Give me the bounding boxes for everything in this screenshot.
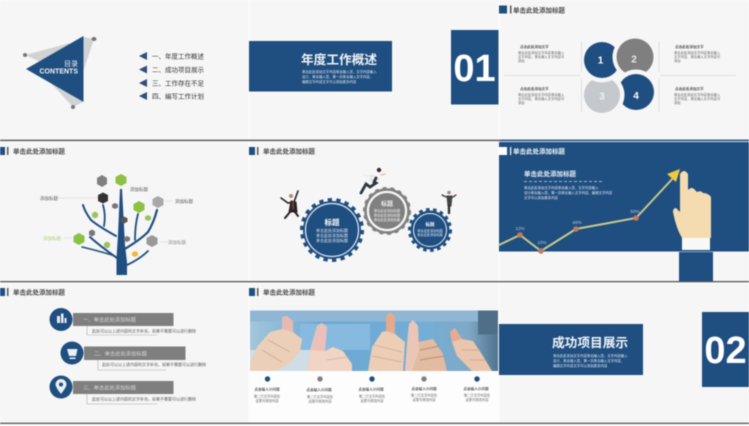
band description: 编辑文字内容文字可以添加更多内容 bbox=[302, 79, 357, 84]
title band bbox=[249, 41, 392, 92]
small gear bbox=[410, 210, 450, 250]
sub heading: 单击此处添加标题 bbox=[524, 169, 576, 178]
big gear: 单击此处添加标题 bbox=[316, 232, 348, 238]
dashed rule bbox=[524, 180, 602, 182]
slide: contents bbox=[0, 0, 248, 141]
header title: 单击此处添加标题 bbox=[263, 146, 316, 156]
circle 2 bbox=[616, 38, 654, 76]
item 1: 此处可以以上述内容的文字补充，如果不需要可以进行删除 bbox=[92, 328, 196, 334]
number 01: 01 bbox=[453, 48, 496, 90]
middle gear: 单击此处添加标题 bbox=[374, 208, 401, 213]
person middle bbox=[361, 168, 385, 193]
item 2: 此处可以以上述内容的文字补充，如果不需要可以进行删除 bbox=[102, 361, 206, 367]
contents list bbox=[139, 52, 204, 100]
text block top right: 添加 bbox=[674, 58, 681, 63]
middle gear: 单击此处添加标题 bbox=[374, 217, 401, 222]
big gear bbox=[302, 200, 362, 260]
text block bottom left: 点击此处添加文字 bbox=[520, 86, 549, 91]
header title: 单击此处添加标题 bbox=[513, 6, 566, 14]
header title: 单击此处添加标题 bbox=[13, 288, 66, 296]
text block bottom right: 文字内容，单击输入文字内容可 bbox=[674, 96, 721, 101]
number box bbox=[451, 30, 498, 104]
small gear: 标题 bbox=[426, 221, 435, 228]
band description bbox=[553, 353, 628, 368]
column texts: 第二行文字内容在 bbox=[307, 394, 334, 399]
photo bbox=[250, 310, 498, 371]
tree labels: 添加标题 bbox=[168, 239, 186, 246]
header title: 单击此处添加标题 bbox=[13, 146, 66, 156]
data labels: 12% bbox=[515, 226, 525, 231]
tree labels: 添加标题 bbox=[175, 198, 193, 205]
circle 1: 1 bbox=[598, 56, 604, 66]
sleeve bbox=[679, 252, 713, 281]
slide: line chart with hand bbox=[499, 142, 749, 281]
blue triangle bbox=[26, 36, 84, 102]
band description: 单击此处添加文字内容单击输入您，文字内容输入 bbox=[553, 353, 628, 358]
circle 2: 2 bbox=[631, 54, 637, 66]
item 1: 一、单击此处添加标题 bbox=[83, 316, 137, 324]
hand 2 bbox=[307, 323, 352, 371]
slide: gears bbox=[249, 142, 498, 281]
contents title bbox=[40, 60, 78, 76]
text block top right bbox=[674, 44, 721, 63]
row separators bbox=[0, 140, 749, 424]
header marker bbox=[499, 6, 512, 14]
data labels: 10% bbox=[537, 240, 547, 245]
hexagon nodes bbox=[74, 174, 164, 257]
small gear: 单击此处添加标题 bbox=[417, 232, 444, 237]
contents list: 一、年度工作概述 bbox=[152, 52, 204, 60]
text block top right: 点击此处添加文字 bbox=[675, 44, 704, 49]
number box bbox=[702, 312, 749, 387]
header marker bbox=[0, 147, 8, 155]
band title: 成功项目展示 bbox=[552, 335, 628, 350]
circle 4 bbox=[618, 74, 654, 110]
slide: tree bbox=[0, 142, 248, 281]
contents list: 四、编写工作计划 bbox=[152, 92, 204, 100]
number 02: 02 bbox=[704, 330, 747, 372]
lower white panel bbox=[250, 371, 498, 423]
band description: 设计，单击输入您，第一页单击输入文字内容， bbox=[553, 358, 624, 363]
middle gear: 标题 bbox=[381, 200, 393, 208]
big gear: 单击此处添加标题 bbox=[316, 227, 348, 233]
text block bottom left: 添加 bbox=[518, 100, 525, 105]
person right bbox=[442, 191, 456, 213]
shirt cuff bbox=[682, 238, 710, 250]
slide: thumbs up photo bbox=[249, 284, 498, 423]
column texts bbox=[254, 386, 491, 404]
header title: 单击此处添加标题 bbox=[263, 288, 316, 296]
header marker bbox=[249, 147, 258, 155]
text block top right: 文字内容，单击输入文字内容可 bbox=[674, 54, 721, 59]
contents list: 三、工作存在不足 bbox=[152, 78, 204, 88]
item 1 bbox=[50, 308, 196, 335]
person left bbox=[281, 191, 298, 218]
leader lines bbox=[58, 198, 172, 242]
column texts: 这里可修改内容 bbox=[465, 397, 489, 402]
tree labels: 添加标题 bbox=[130, 186, 148, 193]
item 3: 三、单击此处添加标题 bbox=[83, 384, 137, 392]
tree labels bbox=[40, 186, 193, 246]
column texts: 点击输入小问题 bbox=[411, 386, 437, 391]
column texts: 点击输入小问题 bbox=[358, 386, 384, 392]
column texts: 点击输入小问题 bbox=[306, 387, 332, 392]
text block bottom right bbox=[674, 86, 721, 105]
text block bottom right: 单击此处添加文字内容单击输入 bbox=[674, 92, 721, 97]
decorative gray triangles bbox=[25, 37, 94, 107]
text block bottom left: 单击此处添加文字内容单击输入 bbox=[518, 92, 565, 97]
hand 3 bbox=[368, 312, 405, 371]
middle gear: 单击此处添加标题 bbox=[374, 212, 401, 218]
circle 4: 4 bbox=[633, 91, 639, 102]
data points bbox=[517, 215, 639, 254]
hand 1 bbox=[250, 316, 302, 371]
contents list: 二、成功项目展示 bbox=[152, 65, 204, 74]
circle 3 bbox=[584, 77, 620, 113]
description bbox=[524, 185, 613, 200]
text block top left: 添加 bbox=[518, 58, 525, 63]
hand 5 bbox=[450, 328, 492, 371]
text block top right: 单击此处添加文字内容单击输入 bbox=[674, 50, 721, 55]
header title: 单击此处添加标题 bbox=[513, 146, 566, 156]
column texts: 点击输入小问题 bbox=[254, 386, 280, 392]
contents title: 目录 bbox=[64, 60, 78, 68]
text block top left bbox=[518, 44, 565, 63]
column texts: 第二行文字内容在 bbox=[411, 392, 438, 398]
small gear: 单击此处添加标题 bbox=[417, 228, 444, 233]
circle 3: 3 bbox=[599, 92, 605, 102]
divider lines bbox=[504, 41, 736, 112]
band description: 单击此处添加文字内容单击输入您，文字内容输入 bbox=[302, 69, 377, 74]
title band bbox=[499, 324, 643, 375]
arrowhead bbox=[667, 169, 680, 182]
contents title: CONTENTS bbox=[40, 68, 78, 76]
description: 文字可以添加更多内容 bbox=[524, 195, 559, 200]
header marker bbox=[499, 147, 511, 155]
band description: 编辑文字内容文字可以添加更多内容 bbox=[553, 363, 608, 368]
circle 1 bbox=[584, 42, 620, 78]
column texts: 第二行文字内容在 bbox=[359, 394, 386, 398]
slide: section 02 bbox=[499, 284, 749, 423]
column texts: 这里可修改内容 bbox=[360, 398, 384, 403]
slide: four circles bbox=[498, 4, 736, 114]
item 3 bbox=[50, 376, 196, 404]
item 3: 此处可以以上述内容的文字补充，如果不需要可以进行删除 bbox=[92, 396, 196, 402]
description: 设计单击输入您，第一页单击输入文字内容，编辑文字内容 bbox=[524, 190, 613, 195]
tree labels: 添加标题 bbox=[40, 195, 58, 202]
item 2 bbox=[60, 342, 206, 370]
text block bottom right: 点击此处添加文字 bbox=[675, 86, 704, 91]
data labels bbox=[515, 209, 640, 245]
slide: section 01 bbox=[249, 0, 498, 141]
gray corner dots bbox=[23, 37, 96, 109]
header marker bbox=[249, 288, 258, 296]
text block bottom left: 文字内容，单击输入文字内容可 bbox=[518, 96, 565, 101]
tree labels: 添加标题 bbox=[43, 235, 61, 242]
band title: 年度工作概述 bbox=[301, 52, 377, 67]
data labels: 40% bbox=[572, 220, 582, 225]
column texts: 这里可修改内容 bbox=[412, 397, 436, 402]
blue panel bbox=[499, 142, 749, 252]
middle gear bbox=[365, 189, 409, 233]
text block top left: 单击此处添加文字内容单击输入 bbox=[518, 50, 565, 55]
text block bottom right: 添加 bbox=[674, 100, 681, 105]
column texts: 这里可修改内容 bbox=[255, 398, 279, 403]
column texts: 第二行文字内容在 bbox=[254, 394, 281, 398]
tree bbox=[82, 189, 157, 275]
hand 4 bbox=[405, 320, 447, 371]
big gear: 单击此处添加标题 bbox=[316, 237, 348, 243]
timeline dots bbox=[265, 376, 480, 382]
description: 单击此处添加文字内容单击输入您，文字内容输入 bbox=[524, 185, 599, 190]
item 2: 二、单击此处添加标题 bbox=[94, 350, 148, 358]
text block bottom left bbox=[518, 86, 565, 105]
trend line bbox=[499, 176, 675, 251]
column texts: 这里可修改内容 bbox=[308, 398, 332, 404]
hand bbox=[673, 171, 711, 238]
text block top left: 点击此处添加文字 bbox=[520, 44, 549, 49]
header marker bbox=[0, 288, 8, 296]
slide: three items bbox=[0, 284, 248, 423]
text block top left: 文字内容，单击输入文字内容可 bbox=[518, 54, 565, 59]
band description: 设计，单击输入您，第一页单击输入文字内容， bbox=[302, 74, 373, 79]
column texts: 第二行文字内容在 bbox=[464, 392, 491, 398]
big gear: 标题 bbox=[324, 217, 340, 227]
data labels: 50% bbox=[630, 209, 640, 214]
band description bbox=[302, 69, 377, 84]
column texts: 点击输入小问题 bbox=[463, 386, 489, 391]
